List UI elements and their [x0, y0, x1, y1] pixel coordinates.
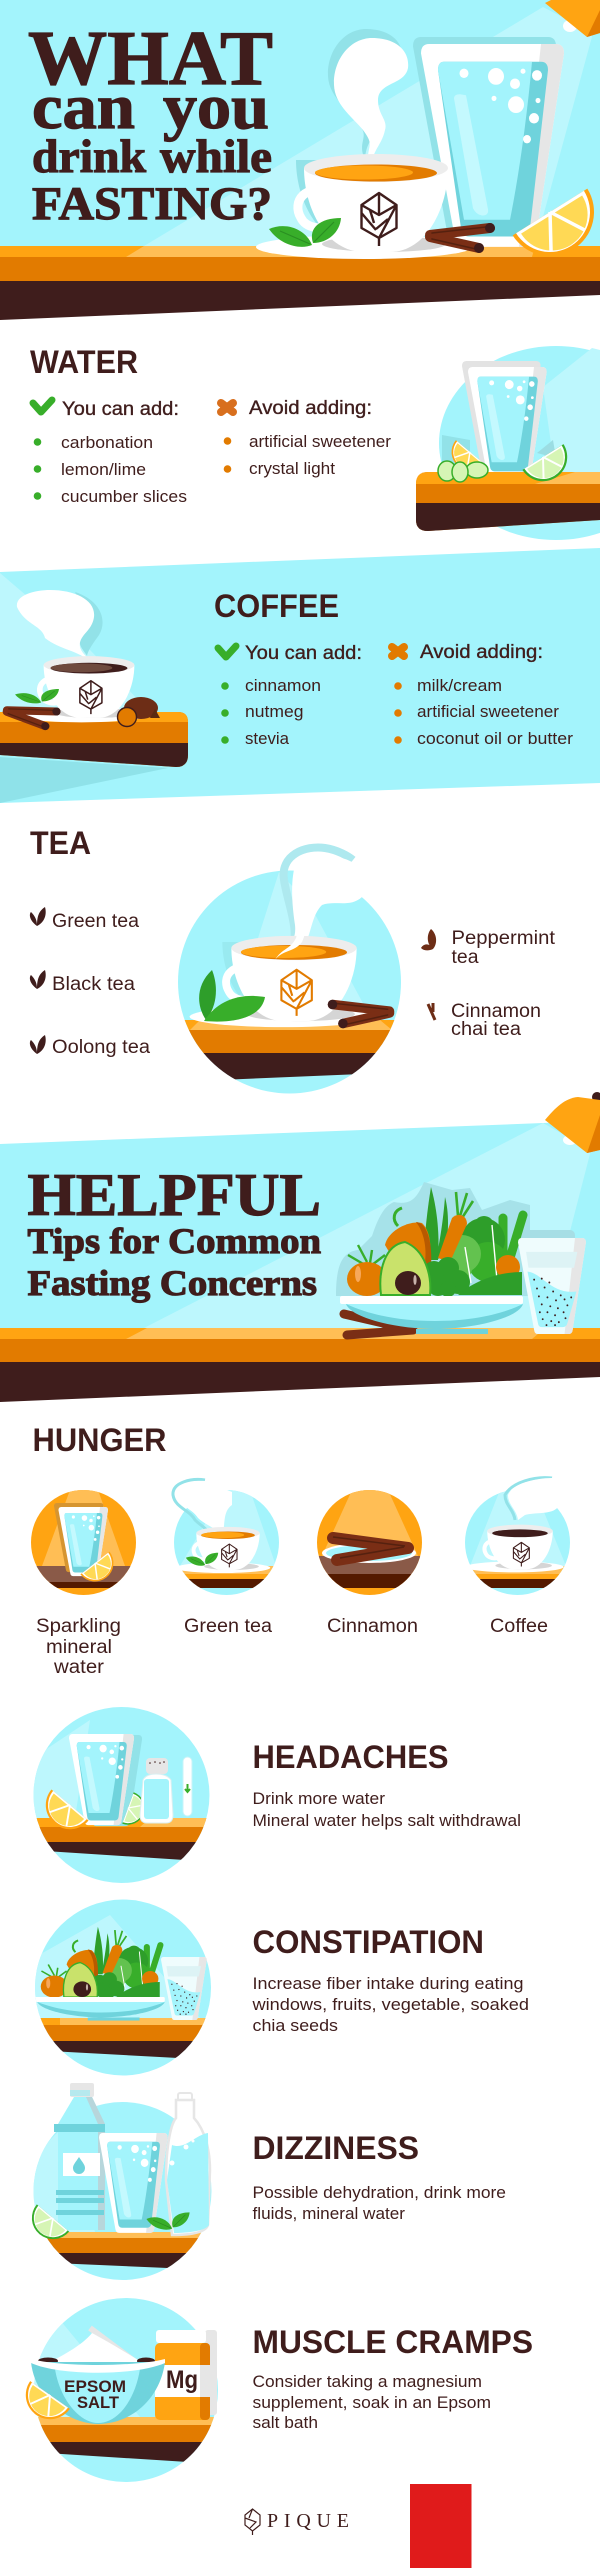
- illustration: epsom salt and magnesium: [16, 2295, 220, 2485]
- icon: mint leaves: [269, 218, 341, 247]
- panel: helpful tips banner: [0, 1092, 600, 1402]
- illustration: sparkling mineral water: [30, 1490, 138, 1596]
- label: avoid adding: Avoid adding:: [249, 398, 372, 419]
- list: water additions: [34, 433, 187, 506]
- label: you can add: You can add:: [245, 643, 362, 664]
- title: FASTING?: [32, 178, 272, 230]
- list: tea types: Green tea: [52, 911, 139, 932]
- icon: cinnamon under bowl: [344, 1314, 413, 1335]
- list: water avoid: artificial sweetener: [249, 432, 391, 451]
- icon: vegetables: [347, 1187, 523, 1297]
- list: coffee additions: stevia: [245, 729, 290, 748]
- labels: hunger remedies: mineral: [46, 1637, 112, 1658]
- icon: water bottle right: [166, 2093, 210, 2235]
- title: while: [160, 131, 272, 183]
- panel: constipation: [30, 1895, 529, 2080]
- icon: orange cross: [221, 403, 233, 412]
- illustration: green tea: [170, 1480, 282, 1596]
- icon: magnesium jar: [155, 2330, 217, 2420]
- list: coffee avoid: artificial sweetener: [417, 702, 559, 721]
- panel: water: [30, 344, 600, 540]
- text: dizziness advice: fluids, mineral water: [252, 2204, 405, 2223]
- text: muscle cramps advice: Consider taking a magnesium: [252, 2372, 482, 2391]
- label: epsom salt: EPSOM: [64, 2377, 126, 2396]
- sky background: [0, 0, 600, 246]
- icon: bowl: [340, 1296, 523, 1334]
- illustration: water and salt: [30, 1705, 215, 1885]
- labels: hunger remedies: Sparkling: [36, 1616, 121, 1637]
- light beam: [0, 573, 150, 712]
- list: tea types right: Cinnamon: [451, 1001, 541, 1022]
- title: Tips for Common: [28, 1221, 321, 1261]
- list: water additions: cucumber slices: [61, 487, 187, 506]
- text: constipation advice: Increase fiber intake during eating: [252, 1974, 524, 1993]
- icon: mint leaves: [15, 689, 59, 703]
- labels: hunger remedies: [36, 1616, 548, 1678]
- list: tea types right: chai tea: [451, 1019, 521, 1040]
- title: can: [32, 72, 135, 142]
- light beam: [144, 1123, 591, 1328]
- text: constipation advice: [251, 1974, 529, 2035]
- text: headaches advice: Mineral water helps salt withdrawal: [252, 1811, 521, 1830]
- list: coffee avoid: [394, 676, 573, 748]
- title: WHAT: [28, 15, 273, 101]
- label: epsom salt: [64, 2377, 126, 2412]
- icon: lemon wedge: [513, 189, 600, 273]
- panel: headaches: [30, 1705, 521, 1885]
- list: coffee additions: [221, 676, 321, 748]
- panel: tea: [30, 825, 556, 1100]
- text: dizziness advice: [252, 2183, 506, 2223]
- icon: coffee cup: [13, 656, 149, 722]
- icon: chia glass shadow: [520, 1230, 575, 1250]
- wordmark: PIQUE: [267, 2510, 349, 2532]
- panel: coffee: [0, 548, 600, 803]
- band background: [0, 548, 600, 803]
- icon: magnesium jar: Mg: [166, 2366, 198, 2394]
- illustration: cinnamon: [315, 1490, 425, 1596]
- illustration: tea cup in circle: [170, 847, 410, 1100]
- illustration: bottles and glass: [23, 2083, 215, 2285]
- icon: orange cross: [392, 647, 404, 656]
- text: headaches advice: Drink more water: [252, 1789, 385, 1808]
- lamp: [545, 1092, 600, 1153]
- list: water avoid: crystal light: [249, 459, 335, 478]
- shelf: [0, 712, 188, 767]
- text: constipation advice: chia seeds: [252, 2016, 338, 2035]
- shadow area: [0, 757, 168, 803]
- title: Fasting Concerns: [28, 1263, 317, 1303]
- text: muscle cramps advice: [252, 2372, 491, 2432]
- label: epsom salt: SALT: [77, 2393, 120, 2412]
- heading: muscle cramps: MUSCLE CRAMPS: [252, 2324, 533, 2360]
- illustration: coffee: [460, 1478, 572, 1596]
- panel: hero: [0, 0, 600, 320]
- title: HELPFUL: [28, 1162, 321, 1228]
- labels: hunger remedies: Coffee: [490, 1616, 548, 1637]
- list: coffee additions: nutmeg: [245, 702, 304, 721]
- list: tea types right: tea: [452, 947, 479, 968]
- list: coffee additions: cinnamon: [245, 676, 321, 695]
- icon: pique leaf: [245, 2509, 260, 2535]
- heading: hunger: HUNGER: [32, 1422, 166, 1458]
- text: muscle cramps advice: salt bath: [252, 2413, 318, 2432]
- icon: cinnamon sticks: [5, 701, 61, 732]
- list: tea types: [30, 907, 150, 1058]
- heading: water: WATER: [30, 344, 138, 380]
- text: dizziness advice: Possible dehydration, drink more: [252, 2183, 506, 2202]
- list: coffee avoid: coconut oil or butter: [417, 729, 573, 748]
- icon: bowl: [31, 2359, 165, 2424]
- panel: dizziness: [23, 2083, 506, 2285]
- heading: coffee: COFFEE: [214, 588, 339, 624]
- table: [0, 1328, 600, 1402]
- list: tea types: Oolong tea: [52, 1037, 150, 1058]
- title: [28, 1162, 321, 1303]
- text: headaches advice: [252, 1789, 521, 1830]
- label: avoid adding: Avoid adding:: [420, 642, 543, 663]
- text: muscle cramps advice: supplement, soak in an Epsom: [252, 2393, 491, 2412]
- panel: muscle cramps: [16, 2295, 533, 2485]
- label: you can add: You can add:: [62, 399, 179, 420]
- text: constipation advice: windows, fruits, vegetable, soaked: [251, 1995, 529, 2014]
- list: water additions: lemon/lime: [61, 460, 146, 479]
- list: water additions: carbonation: [61, 433, 153, 452]
- footer: pique logo: [245, 2509, 349, 2535]
- light beam: [144, 7, 593, 246]
- list: coffee avoid: milk/cream: [417, 676, 502, 695]
- title: drink: [32, 131, 147, 183]
- heading: headaches: HEADACHES: [252, 1739, 448, 1775]
- list: tea types: Black tea: [52, 974, 135, 995]
- list: tea types right: Peppermint: [452, 928, 556, 949]
- icon: tea cup: [256, 154, 472, 259]
- lamp: [545, 0, 600, 37]
- title: you: [163, 72, 269, 142]
- icon: steam: [17, 590, 103, 663]
- icon: cinnamon sticks: [430, 223, 495, 253]
- icon: chia seed glass: [518, 1238, 586, 1334]
- labels: hunger remedies: water: [53, 1657, 105, 1678]
- icon: water bottle left: [54, 2083, 105, 2230]
- icon: green check: [218, 646, 236, 657]
- icon: green check: [33, 400, 52, 412]
- illustration: vegetables and chia: [30, 1895, 215, 2080]
- icon: sparkling water glass: [413, 37, 564, 247]
- labels: hunger remedies: Cinnamon: [327, 1616, 418, 1637]
- banner background: [0, 1121, 600, 1328]
- heading: dizziness: DIZZINESS: [252, 2130, 419, 2166]
- heading: constipation: CONSTIPATION: [252, 1924, 484, 1960]
- list: water avoid: [224, 432, 391, 478]
- illustration: water glass on shelf: [416, 346, 600, 540]
- heading: tea: TEA: [30, 825, 91, 861]
- table: [0, 246, 600, 320]
- icon: steam: [296, 29, 440, 244]
- icon: nutmeg: [118, 697, 160, 726]
- labels: hunger remedies: Green tea: [184, 1616, 272, 1637]
- vegetable shadow: [336, 1182, 530, 1296]
- red block: [410, 2484, 472, 2568]
- title: [28, 15, 273, 230]
- icon: salt mound: [90, 2328, 142, 2367]
- list: tea types right: [421, 928, 556, 1040]
- panel: hunger: [30, 1422, 572, 1678]
